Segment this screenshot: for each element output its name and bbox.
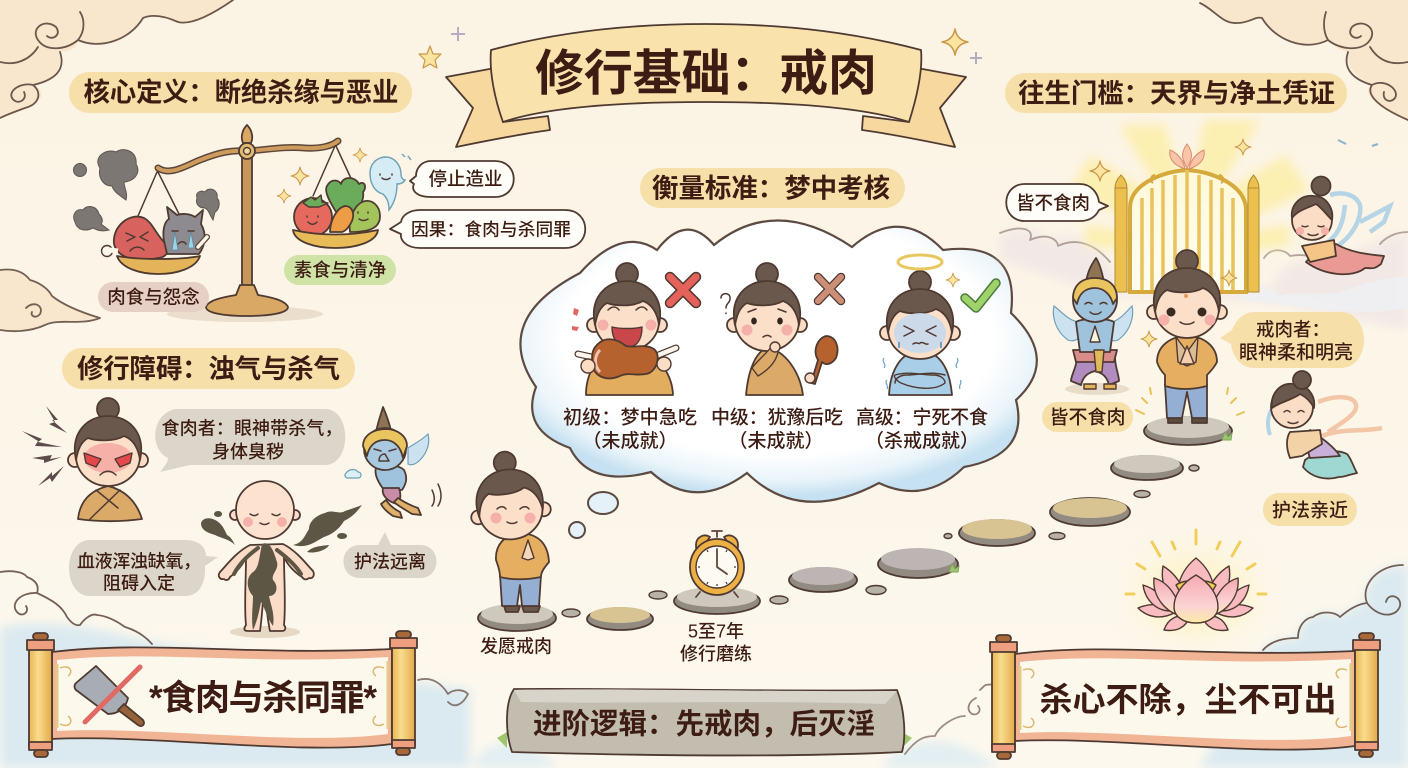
speech bubble: killing aura: 身体臭秽 [212,442,284,462]
scale shadow [167,306,323,322]
speech bubble: no one eats meat: 皆不食肉 [1016,192,1090,214]
level captions: 初级：梦中急吃 [563,402,697,430]
heavenly clouds behind gate [1000,229,1408,330]
speech bubble: killing aura: 食肉者：眼神带杀气， [162,414,342,440]
speech bubble: turbid blood: 血液浑浊缺氧， [77,552,201,572]
speech bubble: guardians leave: 护法远离 [354,552,426,572]
figure: body with turbid qi [201,481,362,638]
smoke [293,505,362,546]
heading: core definition: 核心定义：断绝杀缘与恶业 [84,70,398,110]
speech bubble: cause and effect: 因果：食肉与杀同罪 [411,216,571,242]
meat [114,217,167,260]
red cross [670,277,696,303]
speech bubble: gentle eyes: 戒肉者： [1256,316,1330,342]
abstainer character [1136,250,1244,423]
label: vegetarian purity: 素食与清净 [294,260,386,280]
small thought puffs [569,492,618,538]
alarm clock [690,531,744,597]
stone plaque [497,689,912,755]
banner main [491,24,921,122]
label: five to seven years: 修行磨练 [680,644,752,664]
label: no one eats meat [1042,402,1133,432]
angry meat eater [22,398,148,521]
green check [965,283,996,308]
advanced: refuses to eat [880,255,996,395]
icon: happy ghost [370,154,411,210]
golden gate [1070,120,1310,292]
bottom right scroll [990,633,1380,759]
speech bubble: stop creating karma: 停止造业 [428,168,503,190]
speech bubble: guardians leave [344,532,436,578]
left pan: meat and grief [74,150,219,274]
heading: threshold of rebirth: 往生门槛：天界与净土凭证 [1018,72,1335,110]
thought bubble clouds [520,220,1037,538]
dream cloud [520,220,1037,502]
speech bubble: killing aura [155,409,345,472]
level captions: （杀戒成就） [865,430,979,452]
label: guardians draw near [1263,493,1357,526]
beginner: eats eagerly [572,263,696,395]
roast meat [592,339,658,378]
icon: stars near banner [419,27,982,68]
title: 修行基础：戒肉 [535,34,877,105]
stepping stone path [478,416,1232,631]
sparkles [291,167,309,185]
label: guardians draw near: 护法亲近 [1272,500,1348,522]
crying cat [163,207,205,254]
halo [898,255,942,269]
label: vow: 发愿戒肉 [480,636,552,656]
title banner [446,24,966,147]
speech bubble: cause and effect [390,210,585,248]
meditating novice [464,447,554,612]
label: vegetarian purity [284,255,396,285]
flying guardian holding nose [345,407,441,518]
speech bubble: turbid blood [69,540,218,596]
intermediate: hesitates [721,263,841,395]
heading: standard of measure: 衡量标准：梦中考核 [652,166,890,206]
label: meat and resentment: 肉食与怨念 [107,286,200,308]
label: five to seven years [680,622,752,664]
stone plaque: 进阶逻辑：先戒肉，后灭淫 [533,702,875,742]
slogan: 杀心不除，尘不可出 [1040,681,1336,718]
lotus [1126,530,1266,635]
question mark [721,294,730,314]
speech bubble: stop creating karma [410,161,514,197]
level captions: 高级：宁死不食 [856,402,988,430]
level captions: 中级：犹豫后吃 [711,402,843,430]
icon: lightning bolts [22,406,67,486]
smoke clouds [74,150,219,231]
heavenly guardian [1053,258,1133,395]
icon: crossed out cleaver [74,666,144,726]
label: meat and resentment [98,282,209,312]
speech bubble: gentle eyes: 眼神柔和明亮 [1239,342,1353,364]
speech bubble: no one eats meat [1006,184,1108,221]
dark blood [248,543,277,630]
slogan: *食肉与杀同罪* [149,679,377,718]
rays [1070,120,1310,260]
level captions: （未成就） [582,430,678,452]
drumstick [811,336,838,384]
upper flying apsara [1292,140,1390,274]
speech bubble: gentle eyes [1220,312,1364,368]
label: five to seven years: 5至7年 [688,622,744,642]
scale stand [158,125,338,316]
lower flying apsara [1268,371,1382,479]
level captions: （未成就） [728,430,824,452]
right pan: vegetables [277,146,380,248]
heading: obstacles to practice: 修行障碍：浊气与杀气 [77,347,340,386]
banner tails [446,68,966,147]
bottom left scroll [27,631,417,757]
muted cross [818,277,841,301]
speech bubble: turbid blood: 阻碍入定 [103,574,175,594]
label: no one eats meat: 皆不食肉 [1049,406,1126,428]
level captions [563,402,988,452]
balance scale [74,125,411,322]
